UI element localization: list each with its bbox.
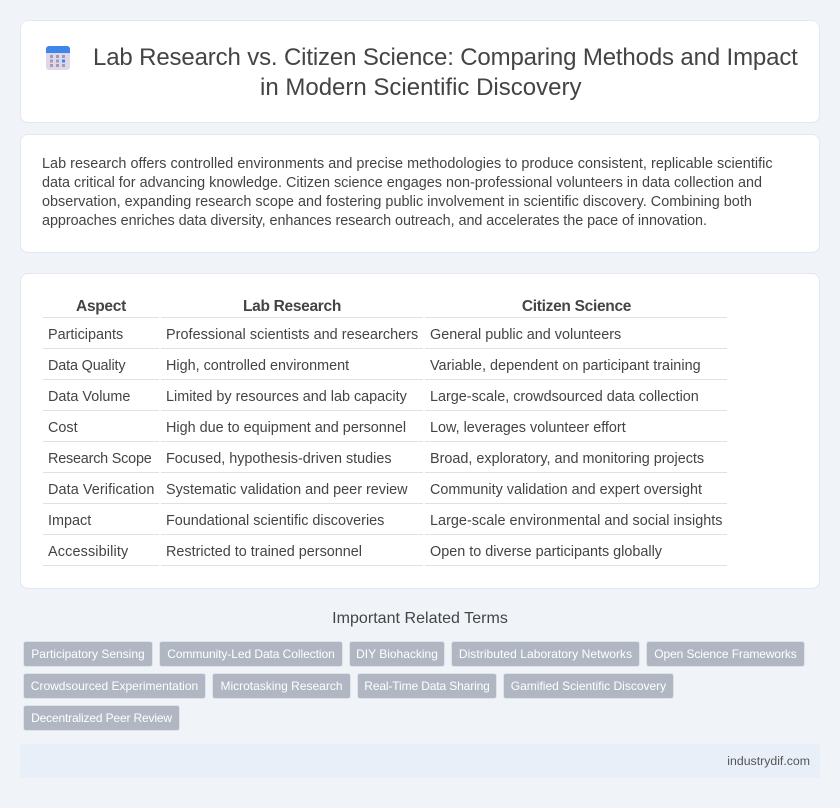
- intro text: [42, 156, 773, 229]
- row: research scope: Broad, exploratory, and monitoring projects: [430, 451, 704, 467]
- row: data quality: Data Quality: [48, 358, 125, 374]
- row: accessibility: Open to diverse participants globally: [430, 544, 662, 560]
- row: participants: Participants: [48, 327, 123, 343]
- tag: [357, 673, 497, 699]
- tag: [23, 705, 180, 731]
- row: participants: General public and volunteers: [430, 327, 621, 343]
- heading: important related terms: Important Related Terms: [332, 610, 508, 627]
- row: research scope: [48, 451, 704, 467]
- row: data volume: Large-scale, crowdsourced data collection: [430, 389, 699, 405]
- title: Lab Research vs. Citizen Science: Comparing Methods and Impact: [93, 44, 798, 71]
- tag: Community-Led Data Collection: [167, 647, 335, 661]
- tag: [451, 641, 640, 667]
- intro text: observation, expanding research scope and fostering public involvement in scientific discovery. Combining both: [42, 194, 752, 210]
- row: research scope: Focused, hypothesis-driven studies: [166, 451, 392, 467]
- row: data volume: Data Volume: [48, 389, 130, 405]
- row: data verification: Systematic validation and peer review: [166, 482, 408, 498]
- intro text: data critical for advancing knowledge. Citizen science engages non-professional volunteers in data collection and: [42, 175, 762, 191]
- tag: Crowdsourced Experimentation: [31, 679, 198, 693]
- row: data quality: [48, 358, 701, 374]
- table header: Citizen Science: [522, 298, 631, 315]
- row: data quality: High, controlled environment: [166, 358, 349, 374]
- icon: calendar: [46, 46, 70, 70]
- row: data verification: [48, 482, 702, 498]
- row: impact: Impact: [48, 513, 91, 529]
- row: participants: [48, 327, 621, 343]
- row: data volume: [48, 389, 699, 405]
- row: impact: [48, 513, 723, 529]
- comparison table: [43, 298, 727, 566]
- table header: Aspect: [76, 298, 126, 315]
- row: impact: Foundational scientific discoveries: [166, 513, 384, 529]
- tag: [212, 673, 351, 699]
- tag: Microtasking Research: [220, 679, 343, 693]
- row: cost: Low, leverages volunteer effort: [430, 420, 626, 436]
- table header: [76, 298, 631, 315]
- tag: Distributed Laboratory Networks: [459, 647, 632, 661]
- row: data verification: Community validation and expert oversight: [430, 482, 702, 498]
- tag: Decentralized Peer Review: [31, 711, 172, 725]
- tag: Open Science Frameworks: [654, 647, 797, 661]
- intro text: approaches enriches data diversity, enhances research outreach, and accelerates the pace of innovation.: [42, 213, 707, 229]
- tag: [159, 641, 343, 667]
- row: data volume: Limited by resources and lab capacity: [166, 389, 407, 405]
- row: accessibility: [48, 544, 662, 560]
- tag: [646, 641, 805, 667]
- tag: Real-Time Data Sharing: [364, 679, 490, 693]
- title: [93, 44, 798, 101]
- row: cost: Cost: [48, 420, 78, 436]
- row: cost: [48, 420, 626, 436]
- row: accessibility: Accessibility: [48, 544, 128, 560]
- footer bar: [20, 744, 820, 778]
- row: cost: High due to equipment and personnel: [166, 420, 406, 436]
- intro text: Lab research offers controlled environments and precise methodologies to produce consistent, replicable scientific: [42, 156, 773, 172]
- panel: introduction: [20, 134, 820, 253]
- row: research scope: Research Scope: [48, 451, 152, 467]
- panel: comparison table: [20, 273, 820, 589]
- row: impact: Large-scale environmental and social insights: [430, 513, 723, 529]
- footer link text: industrydif.com: [727, 754, 810, 768]
- tag: Participatory Sensing: [31, 647, 145, 661]
- row: data verification: Data Verification: [48, 482, 154, 498]
- title: in Modern Scientific Discovery: [260, 74, 581, 101]
- tag: DIY Biohacking: [356, 647, 438, 661]
- related terms tags: [23, 641, 805, 731]
- tag: Gamified Scientific Discovery: [511, 679, 666, 693]
- header panel: [20, 20, 820, 123]
- row: accessibility: Restricted to trained personnel: [166, 544, 362, 560]
- table header: Lab Research: [243, 298, 341, 315]
- tag: [23, 673, 206, 699]
- tag: [503, 673, 674, 699]
- tag: [349, 641, 445, 667]
- tag: [23, 641, 153, 667]
- row: data quality: Variable, dependent on participant training: [430, 358, 701, 374]
- row: participants: Professional scientists and researchers: [166, 327, 418, 343]
